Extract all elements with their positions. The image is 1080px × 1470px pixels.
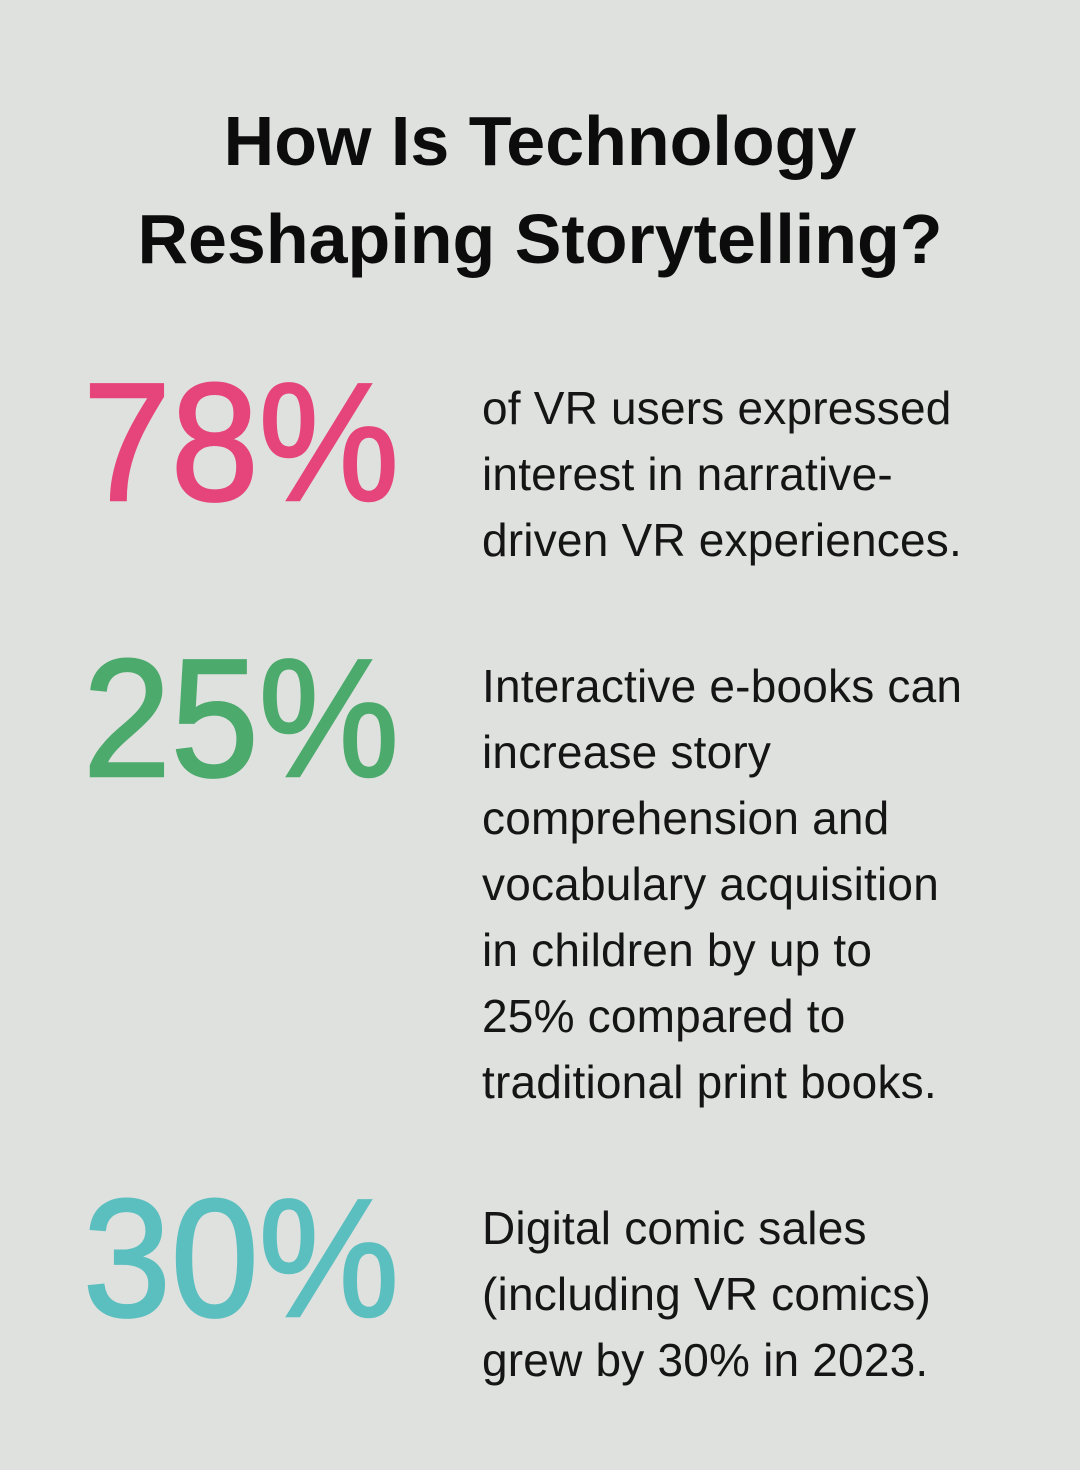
text: 78% description xyxy=(482,382,962,566)
text: 30% description: Digital comic sales xyxy=(482,1202,867,1254)
text: 25% description: comprehension and xyxy=(482,792,889,844)
text: 25% description: vocabulary acquisition xyxy=(482,858,939,910)
text: 30% description: (including VR comics) xyxy=(482,1268,931,1320)
text: 78% description: of VR users expressed xyxy=(482,382,952,434)
text: 25% description: 25% compared to xyxy=(482,990,846,1042)
stat: 25%: 25% xyxy=(83,624,399,812)
text: 30% description xyxy=(482,1202,931,1386)
text: 30% description: grew by 30% in 2023. xyxy=(482,1334,928,1386)
title: How Is Technology xyxy=(224,102,856,180)
title xyxy=(137,102,943,278)
title: Reshaping Storytelling? xyxy=(137,200,943,278)
stat: 78%: 78% xyxy=(83,348,399,536)
text: 25% description: increase story xyxy=(482,726,771,778)
text: 25% description xyxy=(482,660,962,1108)
text: 25% description: Interactive e-books can xyxy=(482,660,962,712)
text: 78% description: interest in narrative- xyxy=(482,448,893,500)
text: 25% description: in children by up to xyxy=(482,924,872,976)
stat: 30%: 30% xyxy=(83,1164,399,1352)
text: 78% description: driven VR experiences. xyxy=(482,514,962,566)
text: 25% description: traditional print books. xyxy=(482,1056,937,1108)
